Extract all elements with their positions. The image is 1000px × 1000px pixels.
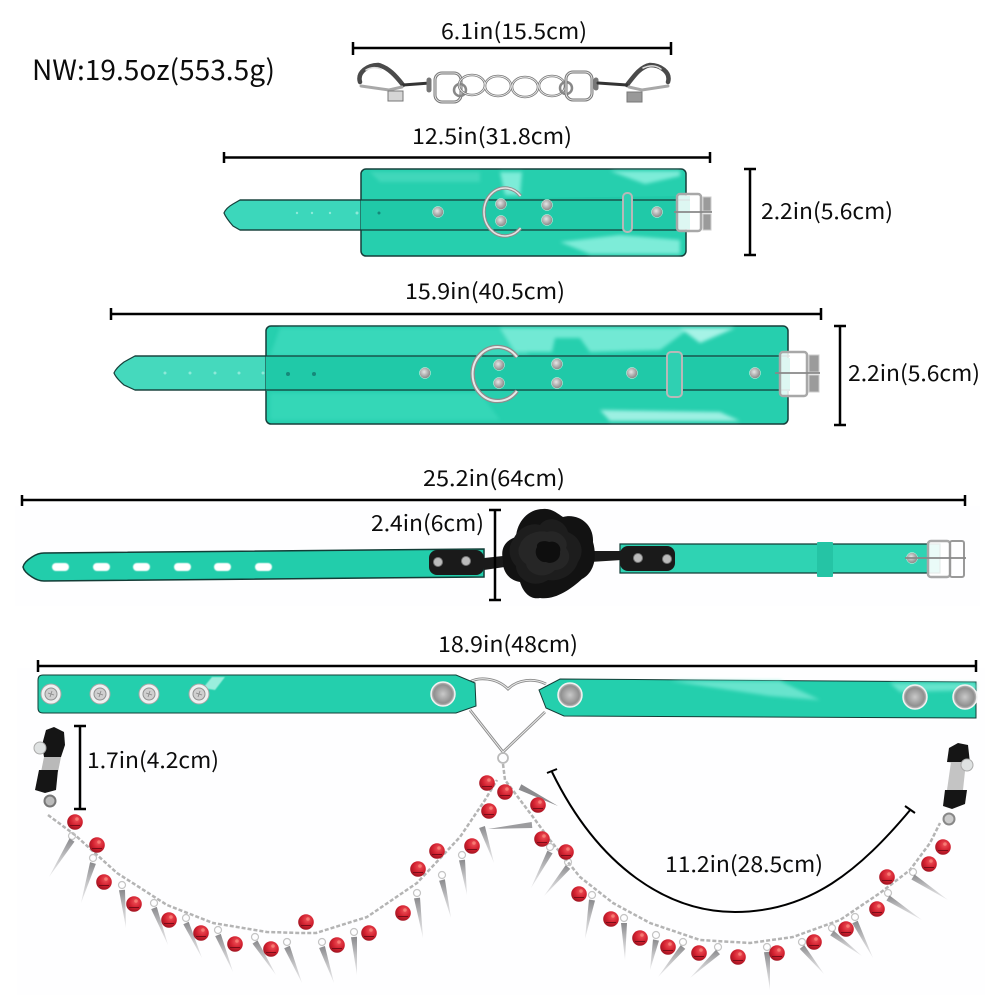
dimension: gag length: 25.2in(64cm) — [423, 461, 565, 493]
small cuff — [224, 169, 712, 256]
rose gag strap — [23, 541, 966, 581]
dimension: small cuff height — [744, 169, 893, 255]
right bell chain — [488, 764, 951, 990]
large cuff — [114, 326, 820, 424]
rose — [502, 509, 595, 598]
weight label: NW:19.5oz(553.5g) — [32, 49, 275, 89]
dimension: connector chain width — [353, 14, 671, 55]
dimension: connector chain width: 6.1in(15.5cm) — [441, 14, 587, 46]
left bell chain — [48, 775, 497, 983]
dimension: collar length: 18.9in(48cm) — [438, 627, 578, 659]
dimension: chain arc length — [547, 769, 915, 912]
dimension: collar length — [38, 627, 976, 672]
dimension: large cuff height: 2.2in(5.6cm) — [848, 356, 980, 388]
dimension: gag length — [22, 461, 965, 506]
dimension: small cuff length: 12.5in(31.8cm) — [412, 119, 572, 151]
dimension: large cuff length — [111, 274, 821, 320]
right clamp — [943, 743, 973, 824]
dimension: rose height — [371, 506, 501, 600]
dimension: small cuff height: 2.2in(5.6cm) — [761, 194, 893, 226]
dimension: small cuff length — [224, 119, 710, 163]
dimension: large cuff length: 15.9in(40.5cm) — [405, 274, 565, 306]
dimension: clamp height: 1.7in(4.2cm) — [87, 743, 219, 775]
left clamp — [34, 727, 65, 806]
dimension: rose height: 2.4in(6cm) — [371, 506, 484, 538]
dimension: large cuff height — [834, 326, 980, 425]
dimension: clamp height — [74, 726, 219, 809]
heart ring — [470, 679, 546, 763]
connector chain with snap hooks — [359, 65, 669, 102]
collar straps — [38, 675, 977, 718]
photo background — [15, 506, 985, 995]
dimension: chain arc length: 11.2in(28.5cm) — [665, 847, 823, 879]
